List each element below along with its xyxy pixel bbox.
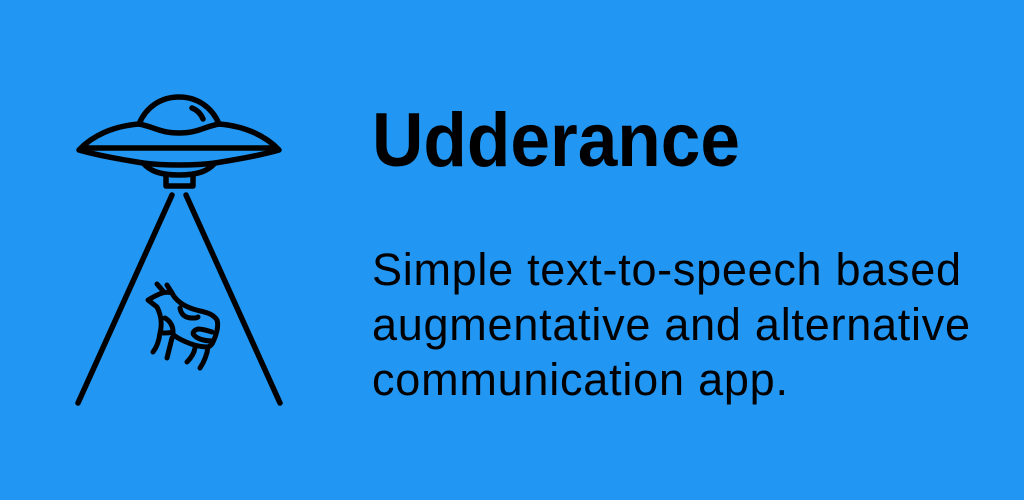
description [372, 244, 970, 405]
description: Simple text-to-speech based [372, 244, 961, 295]
title: Udderance [372, 98, 740, 183]
description: communication app. [372, 354, 788, 405]
icon: UFO abducting cow [78, 97, 280, 403]
icon: UFO saucer [79, 97, 279, 186]
icon: cow [148, 284, 218, 368]
icon: tractor beam [78, 195, 280, 403]
description: augmentative and alternative [372, 299, 970, 350]
